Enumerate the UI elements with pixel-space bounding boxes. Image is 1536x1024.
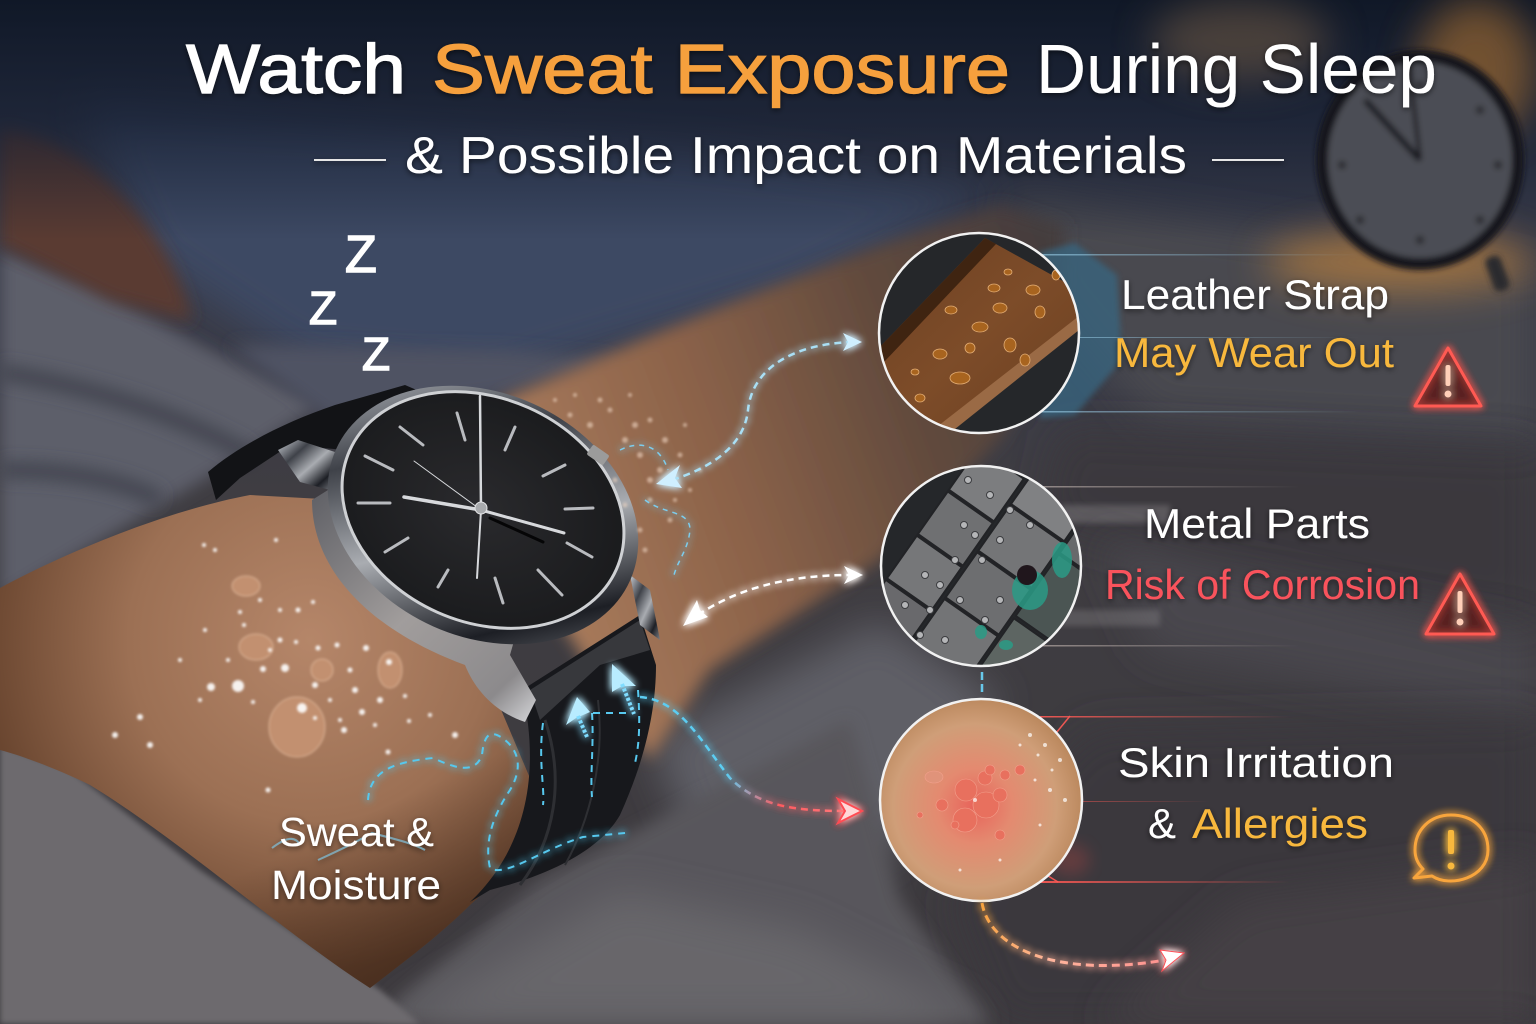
watch lug right bbox=[630, 575, 660, 640]
label: leather strap bbox=[1114, 271, 1394, 376]
label: skin irritation: Allergies bbox=[1192, 800, 1368, 847]
sleep Z letters: Z bbox=[345, 226, 377, 284]
arrow: irritation to outcome bbox=[982, 903, 1184, 971]
alarm clock bbox=[1316, 50, 1524, 293]
title: During Sleep bbox=[1036, 30, 1437, 108]
label: metal parts bbox=[1105, 500, 1420, 608]
label: leather strap: Leather Strap bbox=[1121, 271, 1389, 318]
arrow: metal parts double-headed bbox=[683, 566, 863, 626]
watch strap bottom bbox=[470, 615, 656, 902]
watch crown bbox=[586, 444, 610, 466]
arm: wrist and hand with sweat bbox=[0, 495, 535, 988]
subtitle: & Possible Impact on Materials bbox=[405, 127, 1187, 185]
arrow: strap to skin irritation bbox=[640, 697, 862, 823]
watch strap top bbox=[208, 385, 440, 500]
icon: warning triangle metal bbox=[1426, 574, 1494, 634]
connector dash between circles bbox=[981, 672, 983, 696]
label: leather strap: May Wear Out bbox=[1114, 329, 1394, 376]
label: skin irritation: Skin Irritation bbox=[1118, 739, 1394, 786]
watch head bbox=[278, 338, 680, 722]
arm: far forearm bbox=[500, 205, 1065, 760]
sleep Z letters bbox=[309, 226, 390, 380]
label: sweat and moisture: Sweat & bbox=[279, 809, 434, 855]
panel: metal parts connector bbox=[1040, 486, 1300, 646]
icon: warning triangle leather bbox=[1415, 348, 1481, 406]
sleep Z letters: Z bbox=[362, 328, 390, 380]
watch hands bbox=[404, 396, 564, 578]
icon: moisture up arrows on strap bbox=[566, 664, 636, 737]
circle image: wet leather strap bbox=[877, 233, 1079, 433]
panel: leather strap connector bbox=[1040, 243, 1360, 418]
label: metal parts: Risk of Corrosion bbox=[1105, 561, 1420, 608]
panel: skin irritation connector bbox=[1022, 716, 1290, 883]
arrow: skin to leather strap bbox=[620, 333, 862, 575]
watch lug left bbox=[278, 440, 335, 490]
label: sweat and moisture bbox=[271, 809, 441, 908]
label: sweat and moisture: Moisture bbox=[271, 862, 441, 908]
title bbox=[186, 30, 1437, 108]
dial bbox=[304, 348, 662, 672]
label: metal parts: Metal Parts bbox=[1144, 500, 1370, 547]
circle image: irritated skin bbox=[880, 699, 1082, 901]
title: Watch bbox=[186, 30, 406, 108]
case side and lower lug bbox=[312, 470, 536, 722]
icon: alert speech bubble bbox=[1414, 815, 1488, 881]
arm shading bbox=[0, 495, 535, 988]
sweat path on skin and strap bbox=[368, 690, 639, 870]
label: skin irritation bbox=[1118, 739, 1394, 847]
bezel bbox=[286, 338, 680, 692]
sweat droplets on skin bbox=[112, 393, 702, 792]
circle image: corroded metal links bbox=[880, 464, 1082, 668]
title: Sweat Exposure bbox=[432, 30, 1010, 108]
sleep Z letters: Z bbox=[309, 282, 337, 334]
label: skin irritation: & bbox=[1148, 800, 1176, 847]
hour markers bbox=[358, 413, 593, 603]
